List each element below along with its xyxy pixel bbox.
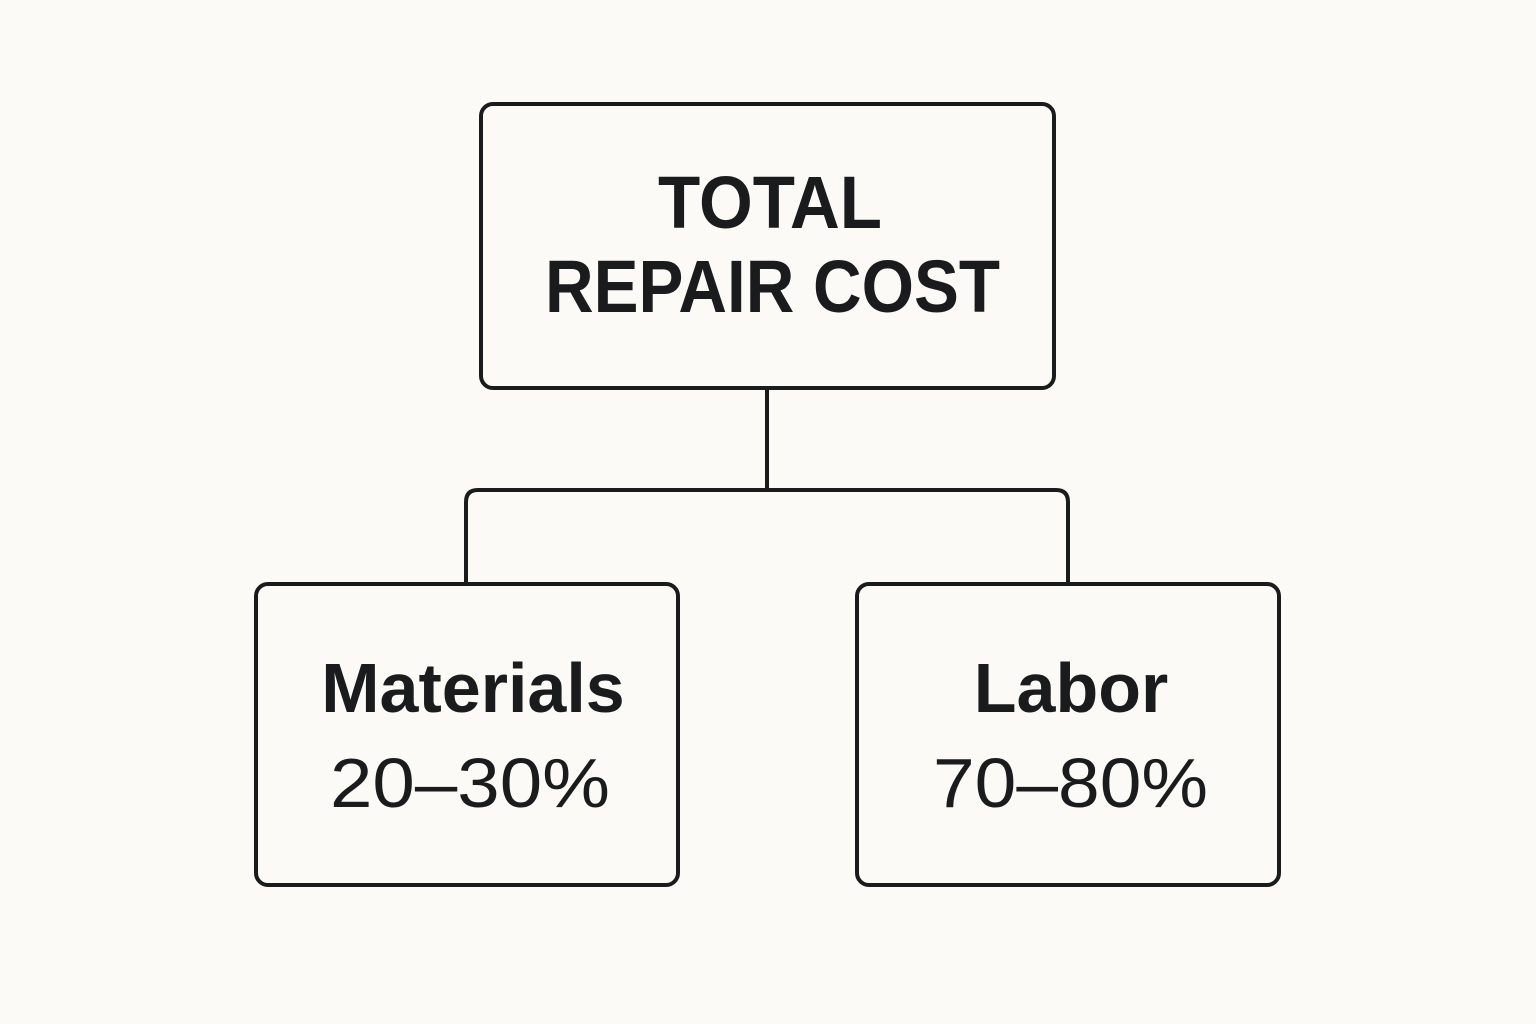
panel: total repair cost xyxy=(481,104,1054,388)
heading: total repair cost xyxy=(545,161,1000,328)
value: materials percentage: 20–30% xyxy=(330,744,610,822)
heading: total repair cost: TOTAL xyxy=(658,161,882,244)
heading: total repair cost: REPAIR COST xyxy=(545,245,1000,328)
panel: materials xyxy=(256,584,678,885)
connector: tree branches xyxy=(466,388,1068,584)
label: labor: Labor xyxy=(974,649,1168,727)
label: materials: Materials xyxy=(321,649,625,727)
panel: labor xyxy=(857,584,1279,885)
value: labor percentage: 70–80% xyxy=(933,744,1208,822)
